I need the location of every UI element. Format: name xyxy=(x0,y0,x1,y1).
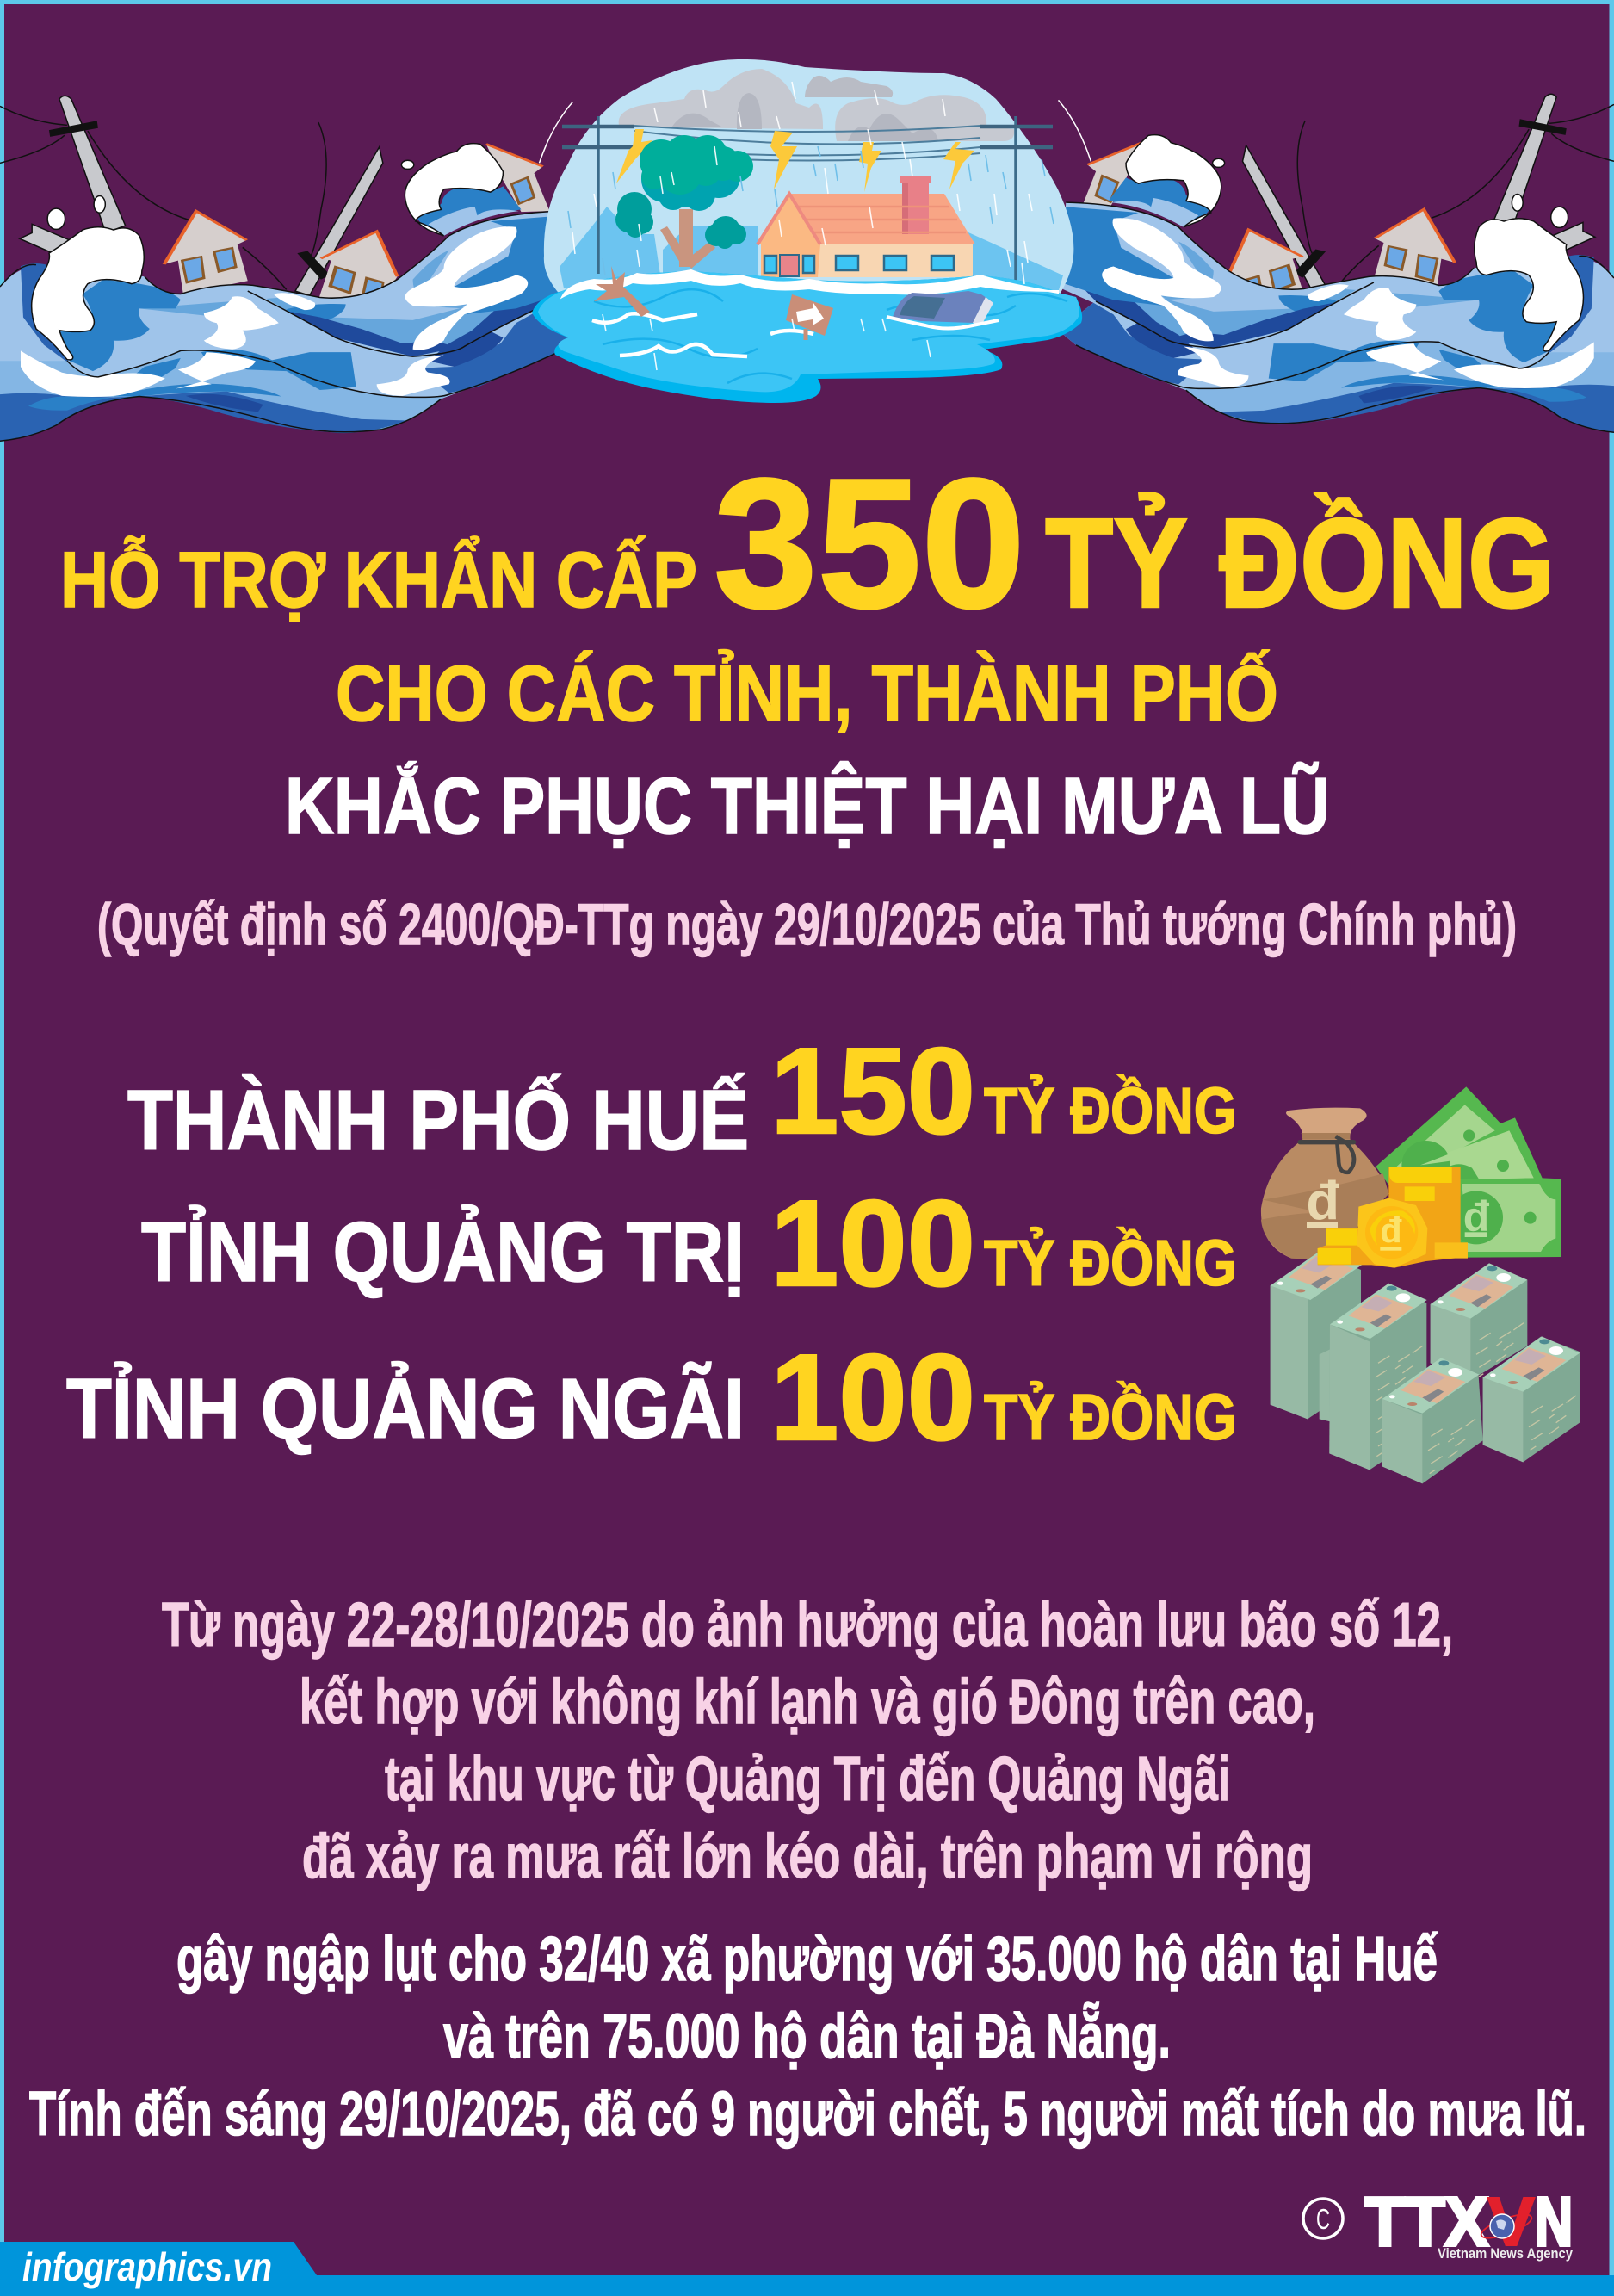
money stack back left xyxy=(1271,1245,1367,1419)
allocation: Huế: 150 xyxy=(770,1023,975,1160)
submerged car xyxy=(887,291,999,329)
title line 1: HỖ TRỢ KHẨN CẤP xyxy=(60,535,697,624)
body text: white paragraph xyxy=(29,1925,1586,2149)
money bag xyxy=(1261,1108,1388,1259)
tree xyxy=(615,135,753,269)
left house two xyxy=(318,232,398,299)
money stack back right xyxy=(1431,1263,1527,1380)
money stack front right xyxy=(1483,1336,1580,1462)
copyright mark: C xyxy=(1316,2203,1330,2235)
gold coins: đ xyxy=(1380,1210,1402,1250)
logo: TTXVN: V xyxy=(1487,2183,1535,2260)
money stack small xyxy=(1320,1349,1332,1422)
foam crest left xyxy=(32,227,144,360)
floating trunk xyxy=(594,266,650,317)
glass dome xyxy=(544,59,1073,297)
title line 1: TỶ ĐỒNG xyxy=(1045,492,1555,634)
copyright mark xyxy=(1303,2199,1343,2238)
rain xyxy=(568,82,1054,370)
footer bar xyxy=(0,2242,1614,2296)
right poles and wires xyxy=(1059,94,1614,297)
allocation: Quảng Ngãi xyxy=(66,1329,1237,1466)
body text: white paragraph: và trên 75.000 hộ dân tại Đà Nẵng. xyxy=(443,2002,1171,2071)
foam crest right xyxy=(405,144,504,236)
flood water xyxy=(532,270,1082,403)
allocation: Huế xyxy=(127,1023,1237,1167)
title line 2: CHO CÁC TỈNH, THÀNH PHỐ xyxy=(336,649,1278,738)
left house one xyxy=(164,211,248,294)
distant buildings xyxy=(560,207,1063,293)
banknotes xyxy=(1376,1086,1561,1258)
storm clouds xyxy=(619,69,1014,141)
power poles and wires xyxy=(562,116,1053,281)
right wave xyxy=(1059,135,1614,432)
allocation: Quảng Trị: TỈNH QUẢNG TRỊ xyxy=(141,1204,745,1299)
logo: TTXVN: TTX xyxy=(1365,2183,1488,2260)
money stack middle xyxy=(1329,1284,1427,1470)
globe: storm scene xyxy=(532,59,1082,403)
logo: TTXVN: N xyxy=(1535,2183,1573,2260)
allocation: Huế: TỶ ĐỒNG xyxy=(984,1074,1237,1147)
icon: money bag, bills, coins and stacks xyxy=(1261,1086,1580,1483)
lightning bolts xyxy=(616,129,974,192)
gold coins xyxy=(1318,1167,1468,1268)
allocation: Quảng Trị: 100 xyxy=(770,1175,975,1312)
money stack front xyxy=(1382,1358,1483,1483)
left wave xyxy=(0,144,572,441)
left poles and wires xyxy=(0,96,572,299)
title line 3: KHẮC PHỤC THIỆT HẠI MƯA LŨ xyxy=(285,761,1330,851)
left house three xyxy=(486,144,549,212)
body text: pink paragraph xyxy=(162,1591,1453,1891)
central house xyxy=(758,176,975,277)
allocation: Quảng Trị: TỶ ĐỒNG xyxy=(984,1227,1237,1299)
allocation: Quảng Ngãi: TỶ ĐỒNG xyxy=(984,1381,1237,1453)
money bag: đ xyxy=(1306,1172,1339,1232)
allocation: Quảng Trị xyxy=(141,1175,1237,1312)
title line 1: 350 xyxy=(714,441,1025,647)
footer label: infographics.vn xyxy=(22,2244,272,2289)
body text: pink paragraph: tại khu vực từ Quảng Trị đến Quảng Ngãi xyxy=(385,1745,1230,1814)
logo: TTXVN xyxy=(1365,2183,1573,2262)
floating sign xyxy=(786,294,833,340)
title line 1 xyxy=(60,441,1555,647)
allocation: Quảng Ngãi: 100 xyxy=(770,1329,975,1466)
allocation: Quảng Ngãi: TỈNH QUẢNG NGÃI xyxy=(66,1361,745,1456)
banknotes: đ xyxy=(1463,1192,1490,1241)
allocation: Huế: THÀNH PHỐ HUẾ xyxy=(127,1073,749,1167)
logo: TTXVN: Vietnam News Agency xyxy=(1438,2245,1573,2262)
illustration: flood scene xyxy=(0,59,1614,441)
